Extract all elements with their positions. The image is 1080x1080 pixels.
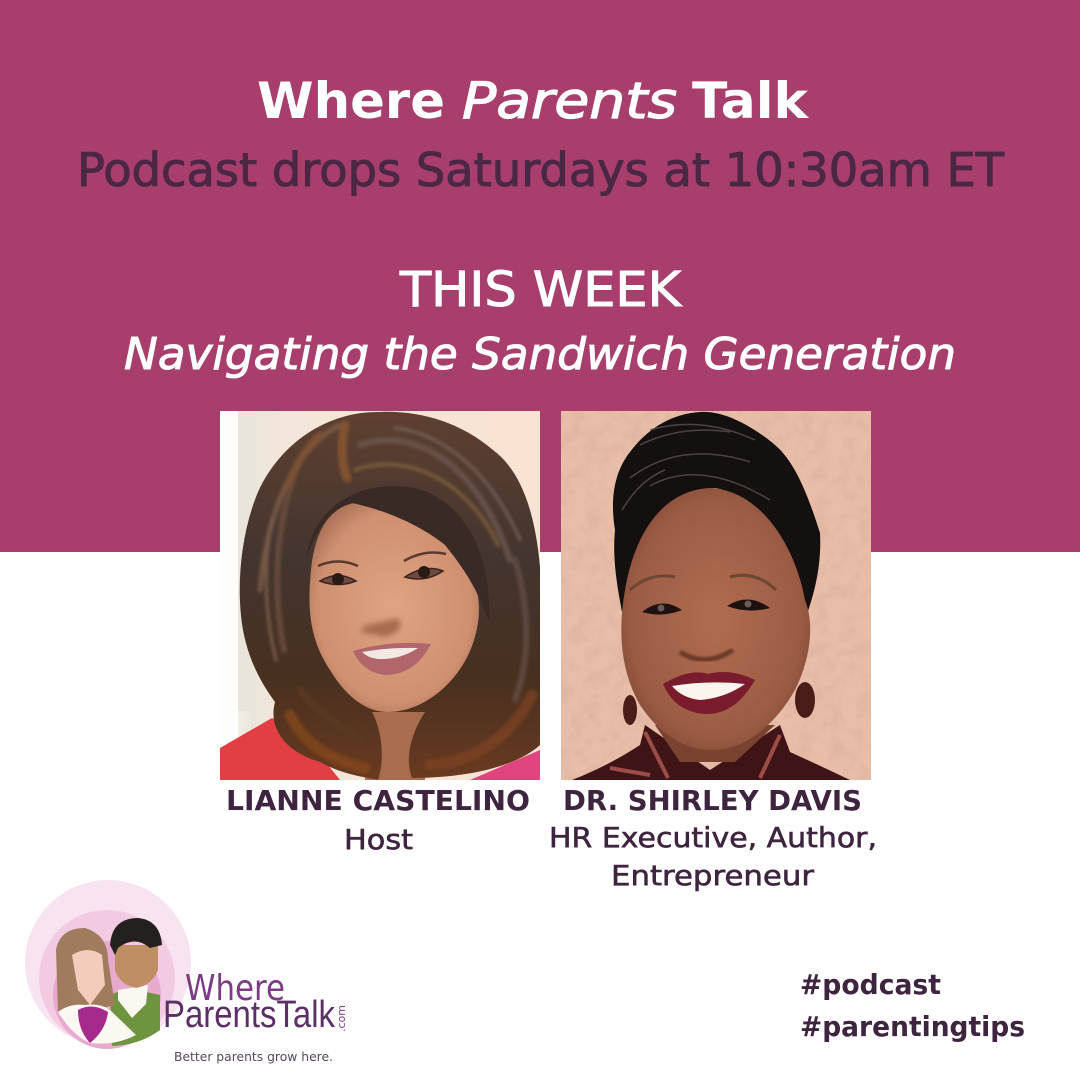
- logo: Where Parents Talk: .com: [335, 1005, 348, 1032]
- role: HR executive: Entrepreneur: [611, 859, 815, 892]
- title: Parents: [462, 72, 677, 130]
- brows: [630, 576, 675, 590]
- nose: [361, 618, 401, 637]
- heading: this week: THIS WEEK: [399, 262, 683, 318]
- nose: [680, 650, 733, 660]
- hair mass: [240, 412, 540, 780]
- subtitle: podcast schedule: Podcast drops Saturdays at 10:30am ET: [77, 143, 1005, 197]
- hashtags: [800, 968, 1025, 1043]
- hashtags: #parentingtips: [800, 1010, 1025, 1043]
- role: HR executive: [549, 821, 877, 892]
- face: [621, 488, 810, 750]
- photo: Lianne Castelino: [220, 411, 540, 780]
- logo man: [110, 918, 162, 1046]
- hashtags: #podcast: [800, 968, 941, 1001]
- brows: [318, 562, 358, 566]
- photo: Dr. Shirley Davis: [561, 411, 871, 780]
- name: Lianne Castelino: LIANNE CASTELINO: [226, 784, 530, 817]
- role: Host: Host: [344, 823, 413, 856]
- face: [309, 503, 479, 712]
- hair: [613, 412, 820, 620]
- eyes: [320, 576, 356, 584]
- title: Where: [257, 72, 445, 130]
- mouth: [663, 672, 755, 714]
- red blouse: [220, 718, 340, 780]
- clothing: [572, 725, 850, 780]
- title: Talk: [692, 72, 810, 130]
- neck: [365, 712, 425, 780]
- logo woman: [56, 928, 136, 1044]
- neck: [655, 725, 775, 762]
- logo wordmark: Where: [185, 968, 285, 1009]
- hair highlights: [260, 425, 532, 768]
- name: Dr. Shirley Davis: DR. SHIRLEY DAVIS: [563, 784, 862, 817]
- logo: Where Parents Talk: ParentsTalk: [163, 994, 336, 1036]
- episode title: Navigating the Sandwich Generation: [124, 329, 956, 380]
- earrings: [623, 695, 637, 725]
- role: HR executive: HR Executive, Author,: [549, 821, 877, 854]
- mouth: [353, 643, 431, 675]
- fringe: [306, 486, 489, 622]
- logo tagline: Better parents grow here.: [174, 1050, 333, 1064]
- top banner: [0, 0, 1080, 552]
- eyes: [642, 603, 682, 615]
- logo: Where Parents Talk: [25, 880, 348, 1064]
- title: [257, 72, 810, 130]
